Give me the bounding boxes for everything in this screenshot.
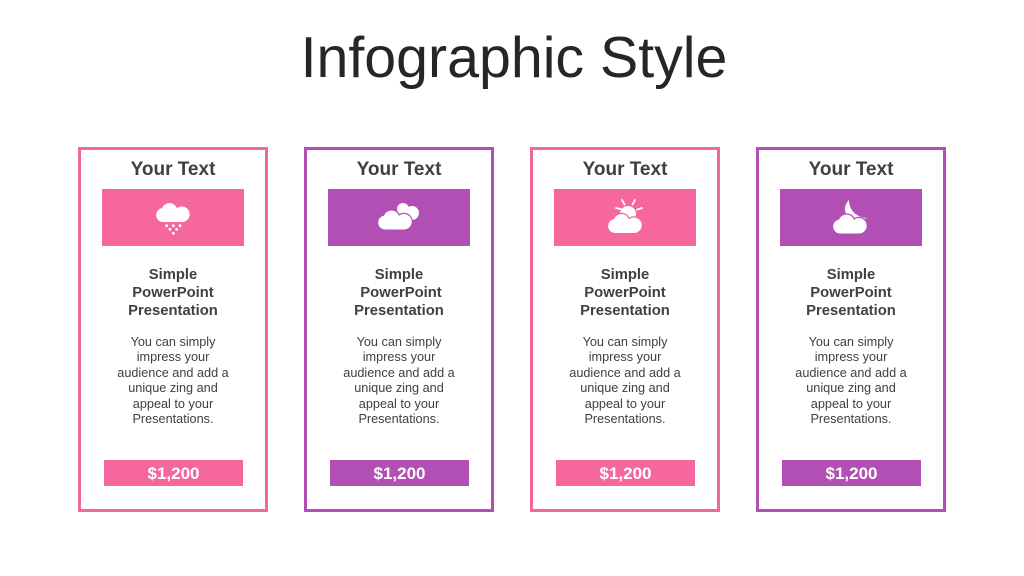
card 4 body text: appeal to your — [811, 397, 891, 411]
card 4 price: $1,200 — [826, 464, 878, 483]
card 3 body text: impress your — [589, 350, 661, 364]
card 1 heading: Your Text — [131, 159, 215, 180]
card 4 heading: Your Text — [809, 159, 893, 180]
card 4 subheading: Presentation — [806, 303, 896, 319]
card 3 body text: Presentations. — [584, 412, 666, 426]
card 1 body text: unique zing and — [128, 381, 218, 395]
card 4 icon band — [780, 189, 922, 246]
card 1 body text — [117, 335, 229, 426]
card 1 subheading: PowerPoint — [132, 285, 214, 301]
card 1 icon band — [102, 189, 244, 246]
title: Infographic Style — [301, 26, 727, 90]
panel: card 1 — [78, 147, 268, 512]
card 3 body text — [569, 335, 681, 426]
card 3 heading: Your Text — [583, 159, 667, 180]
card 4 body text: unique zing and — [806, 381, 896, 395]
panel: card 4 — [756, 147, 946, 512]
card 4 subheading — [806, 267, 896, 319]
card 3 body text: You can simply — [583, 335, 667, 349]
card 1 body text: Presentations. — [132, 412, 214, 426]
card 4 body text: impress your — [815, 350, 887, 364]
card 3 body text: appeal to your — [585, 397, 665, 411]
card 2 body text: You can simply — [357, 335, 441, 349]
icon: two clouds — [378, 203, 419, 230]
card 1 price: $1,200 — [148, 464, 200, 483]
card 1 price — [104, 460, 243, 486]
card 2 body text — [343, 335, 455, 426]
card 2 body text: audience and add a — [343, 366, 455, 380]
card 3 icon band — [554, 189, 696, 246]
card 2 icon band — [328, 189, 470, 246]
card 4 price — [782, 460, 921, 486]
card 3 subheading: PowerPoint — [584, 285, 666, 301]
card 2 subheading: Simple — [375, 267, 423, 283]
card 2 subheading: PowerPoint — [360, 285, 442, 301]
card 3 price — [556, 460, 695, 486]
card 1 body text: audience and add a — [117, 366, 229, 380]
card 2 price — [330, 460, 469, 486]
card 4 subheading: PowerPoint — [810, 285, 892, 301]
card 1 body text: impress your — [137, 350, 209, 364]
card 3 subheading — [580, 267, 670, 319]
card 1 body text: appeal to your — [133, 397, 213, 411]
card 3 subheading: Simple — [601, 267, 649, 283]
icon: moon behind cloud — [833, 200, 868, 234]
card 1 body text: You can simply — [131, 335, 215, 349]
card 3 subheading: Presentation — [580, 303, 670, 319]
card 3 price: $1,200 — [600, 464, 652, 483]
card 4 body text: Presentations. — [810, 412, 892, 426]
panel: card 2 — [304, 147, 494, 512]
card 1 subheading: Simple — [149, 267, 197, 283]
card 2 heading: Your Text — [357, 159, 441, 180]
card 2 body text: unique zing and — [354, 381, 444, 395]
card 3 body text: audience and add a — [569, 366, 681, 380]
card 2 body text: impress your — [363, 350, 435, 364]
card 4 body text — [795, 335, 907, 426]
card 2 subheading: Presentation — [354, 303, 444, 319]
card 2 subheading — [354, 267, 444, 319]
card 2 price: $1,200 — [374, 464, 426, 483]
card 3 body text: unique zing and — [580, 381, 670, 395]
card 4 body text: audience and add a — [795, 366, 907, 380]
card 1 subheading: Presentation — [128, 303, 218, 319]
icon: sun behind cloud — [608, 199, 643, 233]
panel: card 3 — [530, 147, 720, 512]
card 4 body text: You can simply — [809, 335, 893, 349]
card 2 body text: Presentations. — [358, 412, 440, 426]
card 1 subheading — [128, 267, 218, 319]
card 4 subheading: Simple — [827, 267, 875, 283]
card 2 body text: appeal to your — [359, 397, 439, 411]
icon: rain cloud — [156, 203, 190, 235]
